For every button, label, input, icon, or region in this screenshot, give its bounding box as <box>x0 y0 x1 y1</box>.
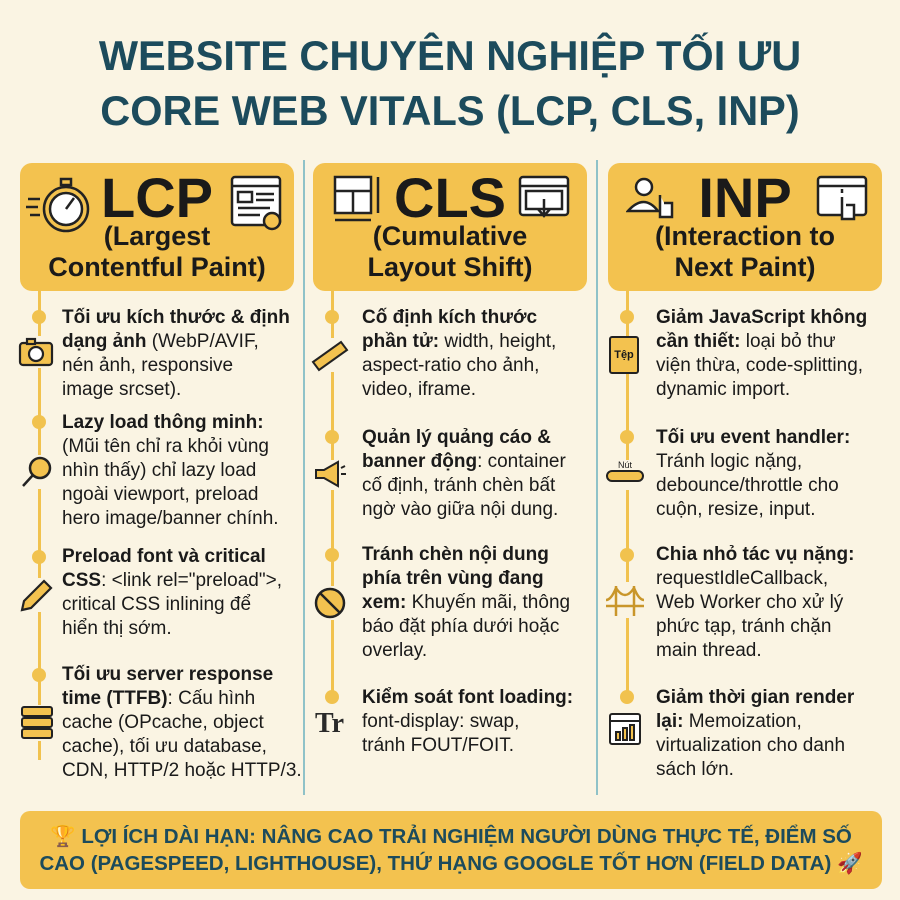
text: avoid inserting content: xem: Khuyến mãi, thông <box>362 592 570 613</box>
text: preload font: critical CSS inlining để <box>62 594 251 615</box>
text: avoid inserting content: báo đặt phía dưới hoặc <box>362 616 559 637</box>
text: reduce rerender: lại: Memoization, <box>656 711 802 732</box>
text: split heavy tasks: phức tạp, tránh chặn <box>656 616 831 637</box>
text: preload font: Preload font và critical <box>62 546 266 567</box>
text: fixed dimensions: aspect-ratio cho ảnh, <box>362 355 539 376</box>
icon: browser with arrow <box>518 176 570 218</box>
text: image optimization: Tối ưu kích thước & định <box>62 307 290 328</box>
text: event handler: Tránh logic nặng, <box>656 451 802 472</box>
text: reduce rerender <box>656 687 854 780</box>
icon: browser with gear <box>230 176 282 230</box>
connector lines <box>38 290 41 760</box>
banner: long-term benefits <box>20 811 882 889</box>
text: image optimization: nén ảnh, responsive <box>62 355 233 376</box>
icon: layout grid <box>334 176 380 222</box>
icon: font Tr: Tr <box>315 708 344 739</box>
text: ads management: Quản lý quảng cáo & <box>362 427 551 448</box>
text: font loading: tránh FOUT/FOIT. <box>362 735 514 756</box>
panel: LCP items <box>18 307 302 781</box>
panel: CLS header: (Cumulative <box>373 221 527 251</box>
text: avoid inserting content: overlay. <box>362 640 427 661</box>
text: event handler: Tối ưu event handler: <box>656 427 850 448</box>
text: event handler: debounce/throttle cho <box>656 475 839 496</box>
text: avoid inserting content: phía trên vùng đang <box>362 568 544 589</box>
text: reduce rerender: sách lớn. <box>656 759 734 780</box>
panel: INP header <box>608 163 882 291</box>
text: lazy load: Lazy load thông minh: <box>62 412 264 433</box>
text: split heavy tasks: Chia nhỏ tác vụ nặng: <box>656 544 854 565</box>
icon: bridge <box>606 582 644 618</box>
text: lazy load <box>62 412 279 529</box>
panel: LCP header: LCP <box>101 166 213 229</box>
text: server response: CDN, HTTP/2 hoặc HTTP/3. <box>62 760 302 781</box>
panel: LCP header: (Largest <box>104 221 210 251</box>
icon: magnifier <box>20 455 54 489</box>
text: reduce javascript: Giảm JavaScript không <box>656 307 867 328</box>
text: avoid inserting content <box>362 544 570 661</box>
icon: button <box>606 460 644 490</box>
icon: chart window <box>608 712 642 746</box>
text: image optimization: dạng ảnh (WebP/AVIF, <box>62 331 259 352</box>
text: fixed dimensions: phần tử: width, height, <box>362 331 556 352</box>
icon: prohibited <box>313 586 347 620</box>
text: split heavy tasks: Web Worker cho xử lý <box>656 592 843 613</box>
text: preload font: hiển thị sớm. <box>62 618 172 639</box>
title <box>98 32 801 134</box>
text: server response: time (TTFB): Cấu hình <box>62 688 255 709</box>
icon: stopwatch <box>26 178 90 232</box>
text: lazy load: hero image/banner chính. <box>62 508 279 529</box>
text: reduce javascript: viện thừa, code-splitting, <box>656 355 863 376</box>
title: WEBSITE CHUYÊN NGHIỆP TỐI ƯU <box>99 32 801 79</box>
text: image optimization <box>62 307 290 400</box>
text: reduce javascript <box>656 307 867 400</box>
panel: CLS header: Layout Shift) <box>368 252 532 282</box>
text: font loading <box>362 687 573 756</box>
text: font loading: Kiểm soát font loading: <box>362 687 573 708</box>
panel: INP header: INP <box>698 166 792 229</box>
panel: LCP header: Contentful Paint) <box>48 252 266 282</box>
text: event handler <box>656 427 850 520</box>
panel: CLS header: CLS <box>394 166 506 229</box>
icon: browser with pointer <box>816 176 868 220</box>
text: split heavy tasks: main thread. <box>656 640 762 661</box>
text: ads management: banner động: container <box>362 451 566 472</box>
icon: pencil <box>20 578 54 612</box>
icon: ruler <box>311 338 349 372</box>
title: CORE WEB VITALS (LCP, CLS, INP) <box>100 87 800 134</box>
icon: file <box>609 336 639 374</box>
text: fixed dimensions: Cố định kích thước <box>362 307 537 328</box>
text: split heavy tasks: requestIdleCallback, <box>656 568 828 589</box>
banner: long-term benefits: 🏆 LỢI ÍCH DÀI HẠN: NÂNG CAO TRẢI NGHIỆM NGƯỜI DÙNG THỰC TẾ, ĐIỂM SỐ <box>50 825 852 848</box>
icon: camera <box>18 336 54 368</box>
text: preload font <box>62 546 282 639</box>
text: split heavy tasks <box>656 544 854 661</box>
text: reduce rerender: Giảm thời gian render <box>656 687 854 708</box>
text: server response: cache), tối ưu database, <box>62 736 267 757</box>
text: server response <box>62 664 302 781</box>
icon: button: Nút <box>618 460 632 470</box>
text: ads management: ngờ vào giữa nội dung. <box>362 499 558 520</box>
text: lazy load: (Mũi tên chỉ ra khỏi vùng <box>62 436 269 457</box>
text: server response: Tối ưu server response <box>62 664 273 685</box>
banner: long-term benefits: CAO (PAGESPEED, LIGHTHOUSE), THỨ HẠNG GOOGLE TỐT HƠN (FIELD DATA) 🚀 <box>39 852 863 875</box>
text: preload font: CSS: <link rel="preload">, <box>62 570 282 591</box>
panel: INP items <box>606 307 867 780</box>
text: server response: cache (OPcache, object <box>62 712 264 733</box>
text: lazy load: ngoài viewport, preload <box>62 484 258 505</box>
text: reduce rerender: virtualization cho danh <box>656 735 845 756</box>
text: fixed dimensions <box>362 307 556 400</box>
text: avoid inserting content: Tránh chèn nội dung <box>362 544 549 565</box>
icon: megaphone <box>313 460 347 490</box>
text: font loading: font-display: swap, <box>362 711 519 732</box>
panel: LCP header <box>20 163 294 291</box>
panel: CLS header <box>313 163 587 291</box>
panel: INP header: (Interaction to <box>655 221 835 251</box>
icon: file: Tệp <box>614 349 634 361</box>
panel: CLS items <box>312 307 573 756</box>
icon: user click <box>626 178 674 218</box>
text: ads management <box>362 427 566 520</box>
panel: INP header: Next Paint) <box>674 252 816 282</box>
text: lazy load: nhìn thấy) chỉ lazy load <box>62 460 256 481</box>
text: reduce javascript: dynamic import. <box>656 379 790 400</box>
text: image optimization: image srcset). <box>62 379 181 400</box>
text: reduce javascript: cần thiết: loại bỏ thư <box>656 331 836 352</box>
icon: server <box>20 705 54 741</box>
text: ads management: cố định, tránh chèn bất <box>362 475 555 496</box>
text: event handler: cuộn, resize, input. <box>656 499 815 520</box>
text: fixed dimensions: video, iframe. <box>362 379 476 400</box>
